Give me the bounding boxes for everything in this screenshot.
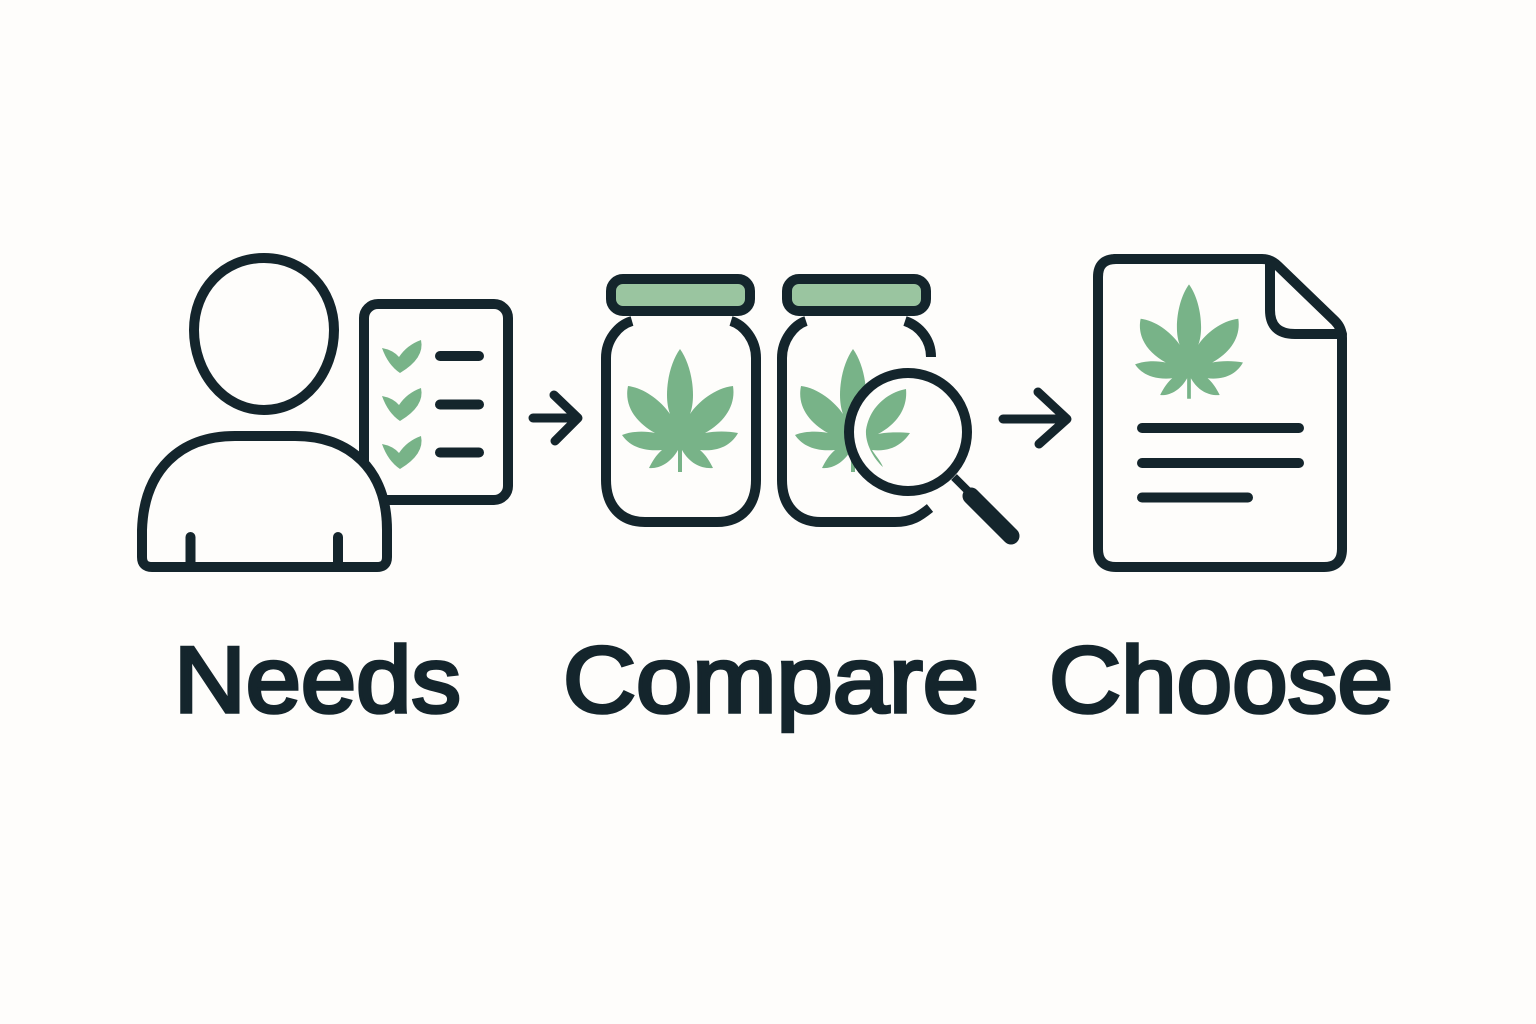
- jar 2 leaf: [795, 349, 911, 472]
- arrow: compare to choose: [1003, 392, 1067, 444]
- checklist sheet: [364, 304, 508, 500]
- icon: checklist: [364, 304, 508, 500]
- step: compare: [563, 279, 1011, 732]
- label: compare: Compare: [563, 627, 979, 732]
- document line 2: [1142, 458, 1299, 468]
- check mark 1: [382, 340, 422, 373]
- checklist line 1: [440, 351, 479, 361]
- document line 3: [1142, 492, 1248, 502]
- document line 1: [1142, 423, 1299, 433]
- checklist line 2: [440, 400, 479, 410]
- jar 1 lid: [611, 279, 750, 311]
- jar 2 upper right edge: [905, 321, 931, 357]
- magnifier handle: [971, 496, 1011, 536]
- jar 1 body: [606, 321, 756, 522]
- right arm line: [333, 537, 343, 567]
- label: choose: Choose: [1049, 627, 1393, 732]
- icon: document: [1098, 259, 1342, 567]
- magnifier lens: [849, 373, 967, 491]
- magnifier neck: [954, 477, 972, 495]
- person body: [142, 436, 387, 567]
- check mark 2: [382, 388, 422, 421]
- magnified leaf: [866, 389, 910, 467]
- document corner fold: [1270, 262, 1342, 334]
- jar 2 body: [782, 321, 930, 522]
- jar 2 lid: [787, 279, 926, 311]
- step: needs: [142, 258, 508, 732]
- person head: [194, 258, 334, 410]
- document outline: [1098, 259, 1342, 567]
- left arm line: [186, 537, 196, 567]
- step: choose: [1049, 259, 1393, 732]
- jar 1 leaf: [622, 349, 738, 472]
- checklist line 3: [440, 448, 479, 458]
- label: needs: Needs: [174, 627, 461, 732]
- icon: jar 2: [782, 279, 931, 522]
- icon: jar 1: [606, 279, 756, 522]
- icon: magnifying glass: [849, 373, 1011, 536]
- check mark 3: [382, 436, 422, 469]
- document leaf: [1135, 284, 1243, 399]
- icon: person: [142, 258, 387, 567]
- arrow: needs to compare: [533, 395, 578, 441]
